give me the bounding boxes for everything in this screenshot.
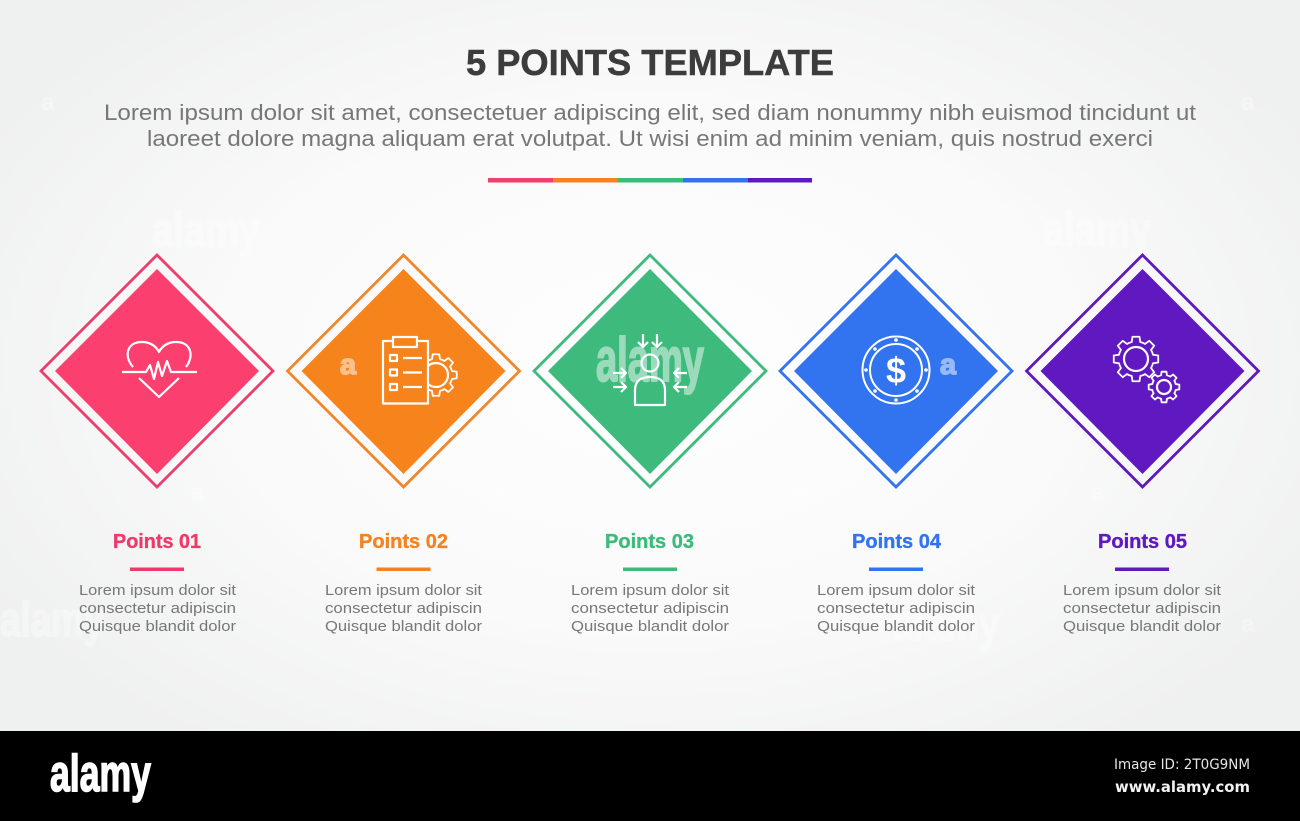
description 5: Lorem ipsum dolor sit	[1063, 582, 1222, 599]
background watermarks: a	[643, 99, 657, 126]
icon: dollar coin	[862, 336, 930, 404]
background watermarks: a	[941, 89, 955, 116]
description 4: Quisque blandit dolor	[817, 618, 975, 635]
description 4: Lorem ipsum dolor sit	[817, 582, 976, 599]
footer logo: alamy	[50, 745, 151, 803]
background watermarks: a	[491, 479, 505, 506]
background watermarks: a	[1241, 89, 1255, 116]
underline 2	[376, 568, 430, 571]
watermark letter: a	[940, 349, 957, 381]
heading: points 03: Points 03	[605, 531, 694, 553]
subtitle text: laoreet dolore magna aliquam erat volutpat. Ut wisi enim ad minim veniam, quis nostrud exerci	[147, 126, 1153, 151]
description 2	[325, 582, 483, 635]
background watermarks: a	[191, 479, 205, 506]
description 1: Lorem ipsum dolor sit	[79, 582, 237, 599]
background watermarks: a	[41, 89, 55, 116]
diamond 1	[41, 255, 273, 487]
watermark over icon: alamy	[596, 326, 704, 395]
subtitle text	[104, 100, 1196, 151]
watermark letter: a	[340, 349, 357, 381]
description 2: Quisque blandit dolor	[325, 618, 482, 635]
description 3: Quisque blandit dolor	[571, 618, 729, 635]
heading: points 02: Points 02	[359, 531, 448, 553]
panel: point 5	[1026, 255, 1258, 635]
description 4: consectetur adipiscin	[817, 600, 975, 617]
heading: points 04: Points 04	[852, 531, 942, 553]
description 3: Lorem ipsum dolor sit	[571, 582, 730, 599]
description 4	[817, 582, 976, 635]
image id: Image ID: 2T0G9NM	[1114, 757, 1250, 773]
description 2: Lorem ipsum dolor sit	[325, 582, 483, 599]
description 3	[571, 582, 730, 635]
subtitle text: Lorem ipsum dolor sit amet, consectetuer adipiscing elit, sed diam nonummy nibh euismod tincidunt ut	[104, 100, 1196, 125]
heading: points 01: Points 01	[113, 531, 201, 553]
icon: heart with pulse	[122, 342, 197, 397]
description 5: Quisque blandit dolor	[1063, 618, 1221, 635]
background watermarks: a	[791, 479, 805, 506]
diamond 4	[780, 255, 1012, 487]
website: www.alamy.com	[1115, 778, 1250, 796]
background watermarks: alamy	[152, 204, 260, 257]
description 5	[1063, 582, 1222, 635]
background watermarks: a	[1241, 611, 1255, 638]
underline 3	[623, 568, 677, 571]
background watermarks	[0, 89, 1255, 651]
panel: point 3	[534, 255, 766, 635]
description 1: Quisque blandit dolor	[79, 618, 236, 635]
panel: point 1	[41, 255, 273, 635]
panel: point 4	[780, 255, 1012, 635]
description 5: consectetur adipiscin	[1063, 600, 1221, 617]
icon: two gears	[1114, 337, 1179, 402]
title: 5 POINTS TEMPLATE	[466, 42, 834, 83]
background watermarks: a	[340, 89, 354, 116]
heading: points 05: Points 05	[1098, 531, 1187, 553]
footer bar	[0, 731, 1300, 821]
description 1: consectetur adipiscin	[79, 600, 236, 617]
icon: person with converging arrows	[613, 334, 687, 405]
diamond 2	[288, 255, 520, 487]
underline 4	[869, 568, 923, 571]
background watermarks: alamy	[1043, 204, 1151, 257]
icon: checklist with gear	[383, 337, 457, 404]
description 3: consectetur adipiscin	[571, 600, 729, 617]
background watermarks: alamy	[0, 594, 104, 647]
multicolour divider bar	[488, 178, 812, 182]
icon: dollar coin: $	[886, 350, 906, 391]
underline 1	[130, 568, 184, 571]
background watermarks: a	[1091, 479, 1105, 506]
diamond 3	[534, 255, 766, 487]
description 2: consectetur adipiscin	[325, 600, 482, 617]
underline 5	[1115, 568, 1169, 571]
description 1	[79, 582, 237, 635]
panel: point 2	[288, 255, 520, 635]
background watermarks: alamy	[892, 598, 1000, 651]
diamond 5	[1026, 255, 1258, 487]
